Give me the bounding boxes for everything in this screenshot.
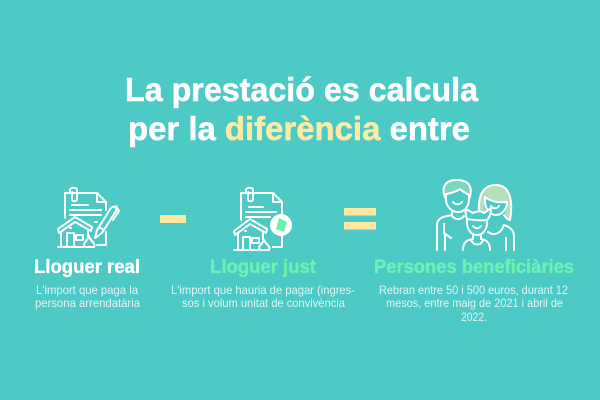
text: Persones beneficiàries description: mesos, entre maig de 2021 i abril de — [386, 296, 563, 310]
heading: Lloguer just: Lloguer just — [210, 257, 317, 278]
title — [125, 71, 479, 147]
icon: tag badge — [270, 214, 292, 236]
icon: contract, house and pen — [58, 188, 119, 247]
text: Lloguer just description — [171, 283, 355, 310]
icon: contract, house and tag — [234, 188, 292, 250]
title: La prestació es calcula — [125, 71, 479, 108]
text: Lloguer just description: L'import que hauria de pagar (ingres- — [171, 283, 355, 297]
equals sign — [344, 208, 376, 230]
title: per la diferència entre — [128, 110, 470, 147]
man — [437, 180, 471, 250]
text: Persones beneficiàries description: 2022. — [461, 310, 487, 324]
text: Lloguer real description: L'import que paga la — [36, 283, 138, 297]
heading: Lloguer real: Lloguer real — [34, 257, 140, 278]
text: Persones beneficiàries description — [379, 283, 568, 324]
text: Persones beneficiàries description: Rebran entre 50 i 500 euros, durant 12 — [379, 283, 568, 297]
icon: family — [437, 180, 514, 250]
child — [463, 208, 491, 250]
text: Lloguer just description: sos i volum unitat de convivència — [182, 296, 345, 310]
text: Lloguer real description: persona arrendatària — [35, 296, 140, 310]
minus sign — [160, 215, 186, 223]
text: Lloguer real description — [35, 283, 140, 310]
heading: Persones beneficiàries: Persones beneficiàries — [374, 257, 574, 278]
woman — [479, 185, 514, 250]
